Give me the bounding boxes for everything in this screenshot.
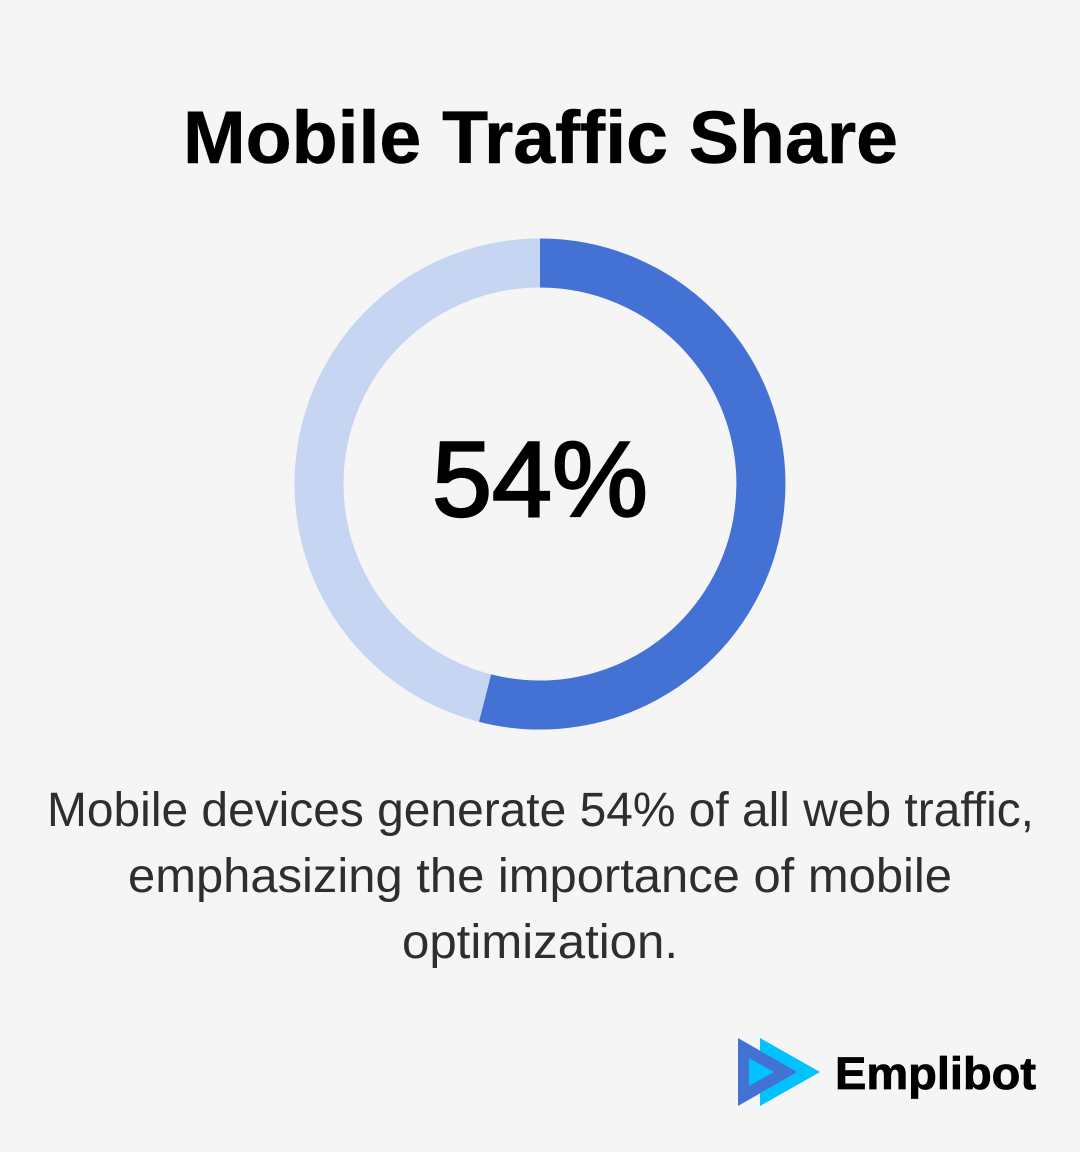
logo: Emplibot: [738, 1038, 1036, 1106]
donut track: remaining share: [319, 263, 761, 705]
donut segment: 54%: [485, 263, 761, 705]
title: Mobile Traffic Share: [183, 96, 898, 179]
description text: emphasizing the importance of mobile: [128, 850, 952, 903]
description text: optimization.: [402, 916, 678, 969]
donut chart: 54% mobile share: [319, 263, 761, 705]
description text: [47, 784, 1034, 969]
description text: Mobile devices generate 54% of all web traffic,: [47, 784, 1034, 837]
icon: double play triangles: [738, 1038, 820, 1106]
logo wordmark: Emplibot: [835, 1048, 1036, 1099]
center value: 54%: [432, 419, 648, 539]
